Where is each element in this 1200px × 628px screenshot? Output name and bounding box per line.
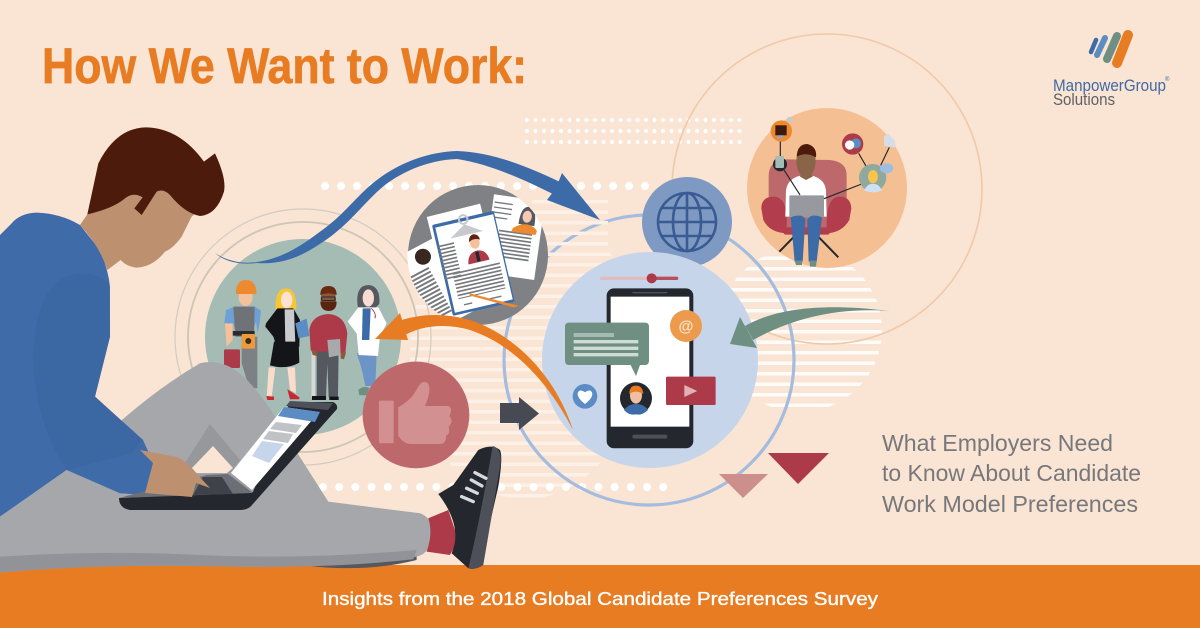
triangle: pink [719,474,768,498]
clipboard resume [431,208,515,316]
hand [140,450,210,497]
title: How We Want to Work: [42,38,527,94]
hoodie [0,213,155,517]
panel: team of workers [175,209,469,468]
worker figure [785,144,827,267]
sock and shoe [427,446,501,569]
phone [607,288,693,448]
network lines [780,138,889,199]
panel: resumes circle [407,185,548,325]
chat bubble [565,323,649,376]
arrow: dark right [500,397,539,430]
band text: Insights from the 2018 Global Candidate Preferences Survey [322,589,878,609]
arrow: green curve [730,307,890,348]
logo: Solutions [1053,90,1115,109]
heart [573,384,597,409]
subtitle: to Know About Candidate [882,460,1141,486]
panel: remote worker in armchair [747,108,907,268]
bottom band [0,565,1200,628]
video [666,377,716,405]
worker with helmet [224,280,261,388]
logo: ® [1165,76,1170,83]
globe icon [642,177,732,267]
logo: ManpowerGroup [1053,76,1166,95]
subtitle: Work Model Preferences [882,491,1138,517]
avatar [620,382,652,415]
at sign [670,310,702,342]
network icons [771,117,895,192]
back right resume [492,194,542,280]
laptop [119,401,337,510]
arrow: blue curve [215,151,600,264]
man with tablet [309,286,347,400]
pencil [469,293,519,307]
at sign: @ [679,318,694,335]
businesswoman [265,288,309,400]
slider [602,273,677,283]
chair [761,159,851,257]
panel: smartphone circle [542,252,758,468]
back left resume [407,238,474,318]
subtitle [882,430,1141,517]
triangle: red [768,453,829,484]
logo [1053,35,1170,109]
legs [0,362,432,573]
arrow: orange curve [375,313,573,430]
head and neck [80,127,224,270]
outer ring around remote worker [672,34,982,344]
phone ring [504,215,794,505]
illustration: man with laptop [0,127,501,573]
thumbs up circle [363,362,469,468]
doctor [348,285,387,395]
subtitle: What Employers Need [882,430,1113,456]
middle sheet [426,204,482,239]
